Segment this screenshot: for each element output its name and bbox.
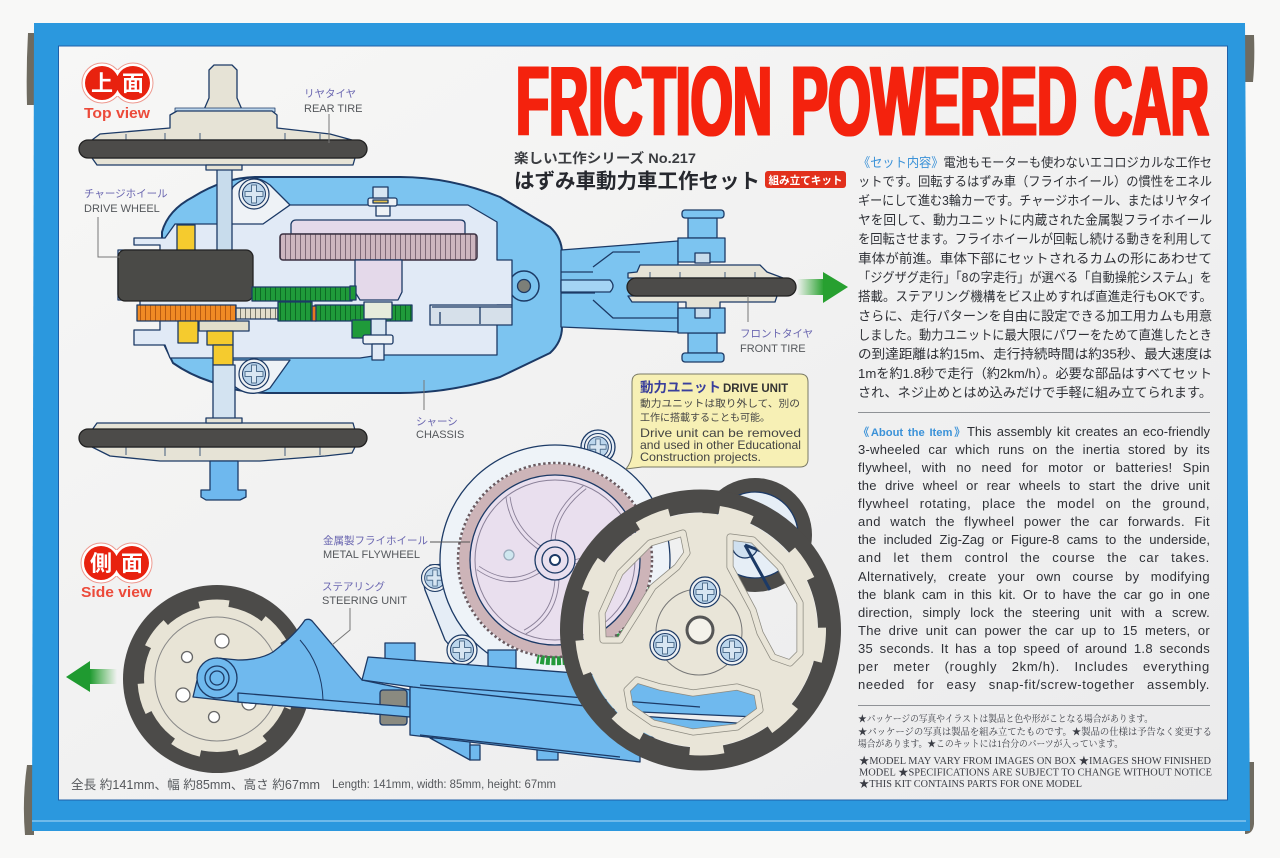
disclaimer notes: 場合があります。★このキットには1台分のパーツが入っています。 xyxy=(858,738,1123,750)
series heading xyxy=(514,150,760,193)
yellow shaft upper xyxy=(177,225,195,251)
Japanese description: 搭載。ステアリング機構をビス止めすれば直進走行もOKです。 xyxy=(858,289,1212,304)
label: steering unit: STEERING UNIT xyxy=(322,595,407,607)
main rear wheel xyxy=(572,501,830,759)
label: metal flywheel xyxy=(323,534,470,561)
drive unit callout: Drive unit can be removed xyxy=(640,426,801,440)
Japanese description: ギーにして進む3輪カーです。チャージホイール、またはリヤタイ xyxy=(858,193,1212,208)
label: drive wheel xyxy=(84,188,168,257)
top view badge: Top view xyxy=(84,105,150,122)
front tire top view xyxy=(627,265,796,308)
disclaimer notes xyxy=(858,713,1212,790)
label: front tire: フロントタイヤ xyxy=(740,328,813,340)
English description xyxy=(858,424,1210,692)
top view car drawing xyxy=(79,65,796,500)
top view badge: 上 xyxy=(91,71,113,96)
Japanese description: 《セット内容》電池もモーターも使わないエコロジカルな工作セ xyxy=(858,155,1212,170)
drive unit callout: 動力ユニット xyxy=(640,379,721,395)
Japanese description: しました。動力ユニットに最大限にパワーをためて直進したとき xyxy=(858,328,1212,342)
series heading: 楽しい工作シリーズ No.217 xyxy=(514,150,696,166)
English description: 35 seconds. It has a top speed of around 1.8 seconds xyxy=(858,641,1210,656)
English description: the drive wheel or rear wheels to start the drive unit xyxy=(858,478,1210,493)
Japanese description: 1mを約1.8秒で走行（約2km/h）。必要な部品はすべてセット xyxy=(858,366,1212,381)
label: chassis: シャーシ xyxy=(416,416,458,428)
English description: Alternatively, create your own course by modifying xyxy=(858,569,1210,584)
Japanese description: ットです。回転するはずみ車（フライホイール）の慣性をエネル xyxy=(858,174,1212,189)
drive unit callout: Construction projects. xyxy=(640,450,761,464)
English description: and let them control the course the car takes. xyxy=(858,550,1210,565)
English description: the blank cam in this kit. Or to have the car go in one xyxy=(858,587,1210,602)
metal flywheel xyxy=(458,463,652,657)
drive unit callout: and used in other Educational xyxy=(640,438,801,452)
drive unit callout: 動力ユニットは取り外して、別の xyxy=(640,397,800,410)
English description: 《About the Item》This assembly kit creates an eco-friendly xyxy=(858,424,1210,439)
label: metal flywheel: 金属製フライホイール xyxy=(323,534,428,547)
English description: needed for easy snap-fit/screw-together assembly. xyxy=(858,677,1210,692)
side view badge: Side view xyxy=(81,584,152,601)
backward arrow xyxy=(66,661,117,692)
side steering arm xyxy=(193,619,410,725)
drive unit housing xyxy=(422,430,670,675)
frame highlight xyxy=(32,820,1246,822)
title xyxy=(516,46,1209,156)
kit badge: 組み立てキット xyxy=(768,173,842,187)
Japanese description: 車体が前進。車体下部にセットされるカムの形にあわせて xyxy=(858,251,1212,266)
label: front tire xyxy=(740,296,813,355)
label: steering unit xyxy=(322,580,407,645)
drive unit base body xyxy=(362,643,760,762)
disclaimer notes: ★パッケージの写真は製品を組み立てたものです。★製品の仕様は予告なく変更する xyxy=(858,726,1212,738)
Japanese description: を回転させます。フライホイールが回転し続ける動きを利用して xyxy=(858,232,1212,246)
drive unit callout: DRIVE UNIT xyxy=(723,383,788,395)
side front wheel xyxy=(123,585,311,773)
label: rear tire xyxy=(304,88,362,143)
dimensions: Length: 141mm, width: 85mm, height: 67mm xyxy=(332,779,556,791)
label: chassis xyxy=(416,380,464,441)
disclaimer notes: ★MODEL MAY VARY FROM IMAGES ON BOX ★IMAGES SHOW FINISHED xyxy=(859,755,1211,767)
top view badge xyxy=(82,63,153,122)
disclaimer notes: ★パッケージの写真やイラストは製品と色や形がことなる場合があります。 xyxy=(858,713,1153,725)
lower bolt xyxy=(363,335,393,360)
Japanese description: の到達距離は約15m、走行持続時間は約35秒、最大速度は xyxy=(858,346,1212,362)
label: front tire: FRONT TIRE xyxy=(740,343,806,355)
disclaimer notes: MODEL ★SPECIFICATIONS ARE SUBJECT TO CHANGE WITHOUT NOTICE xyxy=(859,766,1212,778)
upper rear tire xyxy=(79,65,367,170)
label: steering unit: ステアリング xyxy=(322,580,385,593)
dimensions xyxy=(71,777,556,792)
side view badge: 側 xyxy=(90,551,112,576)
label: drive wheel: DRIVE WHEEL xyxy=(84,203,160,215)
front steering arm xyxy=(561,210,725,362)
English description: The drive unit can power the car up to 15 meters, or xyxy=(858,623,1210,638)
English description: direction, simply lock the steering unit with a screw. xyxy=(858,605,1210,620)
kit badge xyxy=(765,171,846,188)
rear small wheel xyxy=(698,478,812,592)
Japanese description: され、ネジ止めとはめ込みだけで手軽に組み立てられます。 xyxy=(858,385,1212,400)
chassis screws xyxy=(228,178,290,393)
label: metal flywheel: METAL FLYWHEEL xyxy=(323,549,420,561)
English description: and watch the flywheel power the car forwards. Fit xyxy=(858,514,1210,529)
drive wheel xyxy=(118,250,253,301)
label: rear tire: リヤタイヤ xyxy=(304,88,356,100)
chassis xyxy=(162,177,562,393)
English description: per meter (roughly 2km/h). Includes everything xyxy=(858,659,1210,674)
label: drive wheel: チャージホイール xyxy=(84,188,168,200)
side view drawing xyxy=(123,430,830,773)
Japanese description: さらに、走行パターンを自由に設定できる加工用カムも用意 xyxy=(858,308,1212,324)
series heading: はずみ車動力車工作セット xyxy=(514,170,760,193)
English description: the included Zig-Zag or Figure-8 cams to the underside, xyxy=(858,532,1210,547)
pivot xyxy=(509,271,539,301)
label: chassis: CHASSIS xyxy=(416,429,464,441)
side view badge xyxy=(81,543,152,601)
Japanese description xyxy=(858,155,1212,400)
Japanese description: 「ジグザグ走行」「8の字走行」が選べる「自動操舵システム」を xyxy=(858,270,1212,285)
English description: 3-wheeled car which runs on the inertia stored by its xyxy=(858,442,1210,457)
title: FRICTION xyxy=(516,46,772,156)
flywheel top view xyxy=(280,220,477,300)
forward arrow xyxy=(797,272,848,303)
top view badge: 面 xyxy=(122,71,144,96)
drive unit callout: 工作に搭載することも可能。 xyxy=(640,411,770,424)
side view badge: 面 xyxy=(121,551,143,576)
English description: flywheel, with no need for motor or batteries! Spin xyxy=(858,460,1210,475)
drive unit callout xyxy=(626,374,808,469)
green gear behind flywheel xyxy=(537,586,653,661)
rear axle upper xyxy=(217,165,232,251)
gearbox body xyxy=(118,205,512,358)
yellow lower shafts xyxy=(178,321,249,365)
rear axle lower xyxy=(213,365,235,423)
lower rear tire xyxy=(79,418,367,500)
dimensions: 全長 約141mm、幅 約85mm、高さ 約67mm xyxy=(71,777,320,792)
English description: flywheel rotating, place the model on the ground, xyxy=(858,496,1210,511)
label: rear tire: REAR TIRE xyxy=(304,103,362,115)
Japanese description: ヤを回して、動力ユニットに内蔵された金属製フライホイール xyxy=(858,212,1212,228)
disclaimer notes: ★THIS KIT CONTAINS PARTS FOR ONE MODEL xyxy=(859,778,1082,790)
top bolt xyxy=(368,187,397,216)
gear train xyxy=(137,286,412,338)
